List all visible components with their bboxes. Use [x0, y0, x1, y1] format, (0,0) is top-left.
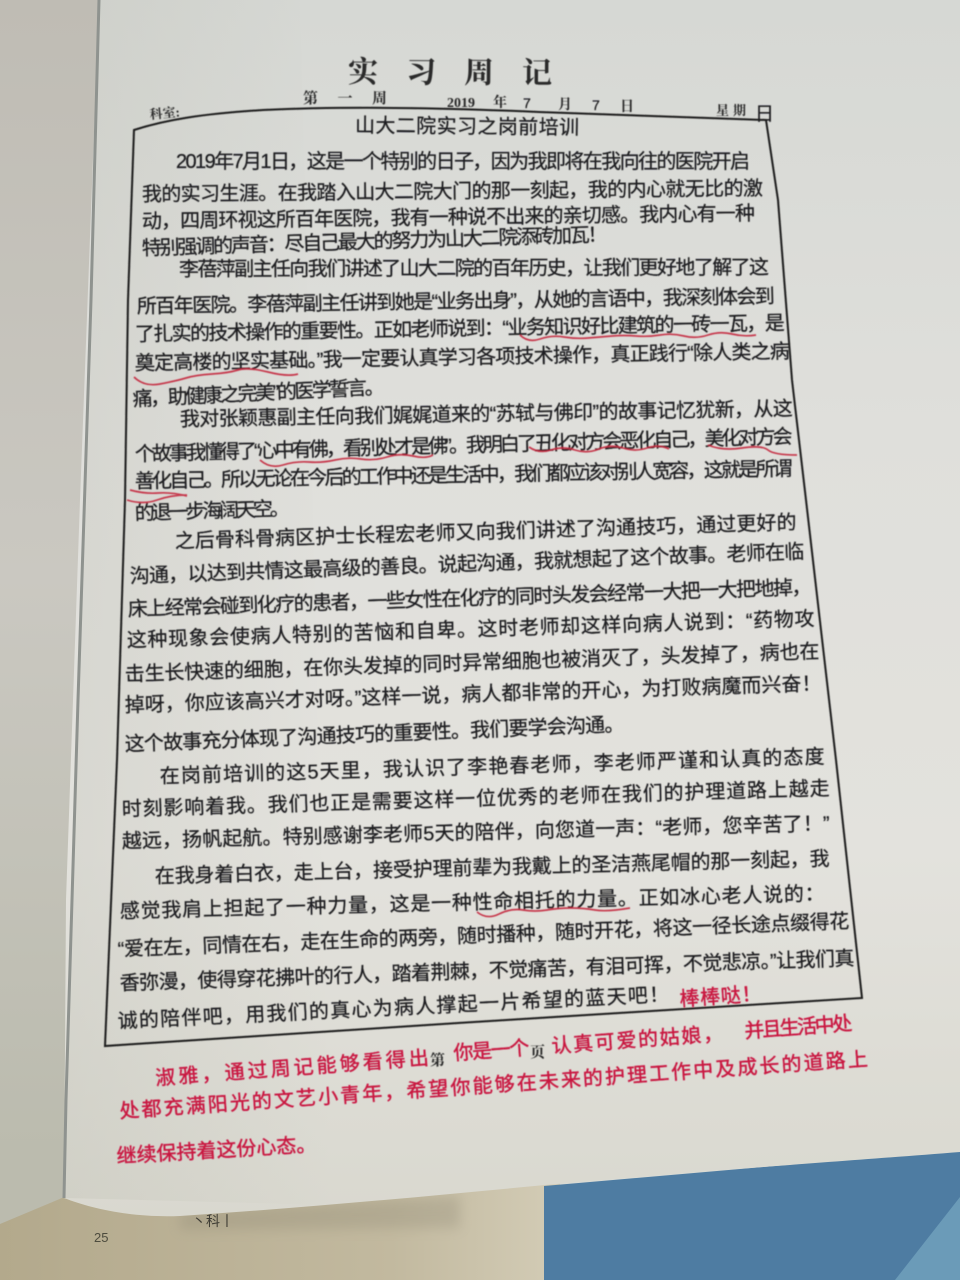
background: light blue cloth corner: [895, 1197, 960, 1280]
date label: 7: [592, 97, 600, 113]
page number: 25: [94, 1230, 108, 1245]
paragraph 4: 沟通，以达到共情这最高级的善良。说起沟通，我就想起了这个故事。老师在临: [129, 540, 805, 588]
paragraph 4: 这种现象会使病人特别的苦恼和自卑。这时老师却这样向病人说到：“药物攻: [126, 607, 815, 652]
paragraph 5: [121, 745, 830, 853]
date label: 7: [523, 95, 531, 111]
paragraph 2: 奠定高楼的坚实基础。”我一定要认真学习各项技术操作，真正践行“除人类之病: [135, 340, 790, 375]
paragraph 4: 这个故事充分体现了沟通技巧的重要性。我们要学会沟通。: [124, 713, 625, 756]
paragraph 3: 我对张颖惠副主任向我们娓娓道来的“苏轼与佛印”的故事记忆犹新，从这: [180, 397, 793, 431]
date label: 2019: [447, 96, 475, 111]
page header: [149, 56, 774, 125]
weekday label: 星期: [716, 103, 746, 118]
teacher red comment: 继续保持着这份心态。: [116, 1133, 317, 1168]
paragraph 1: 我的实习生涯。在我踏入山大二院大门的那一刻起，我的内心就无比的激: [142, 177, 763, 206]
background: table surface: [0, 1170, 560, 1280]
department label: 科室:: [149, 104, 180, 122]
paragraph 2: 李蓓萍副主任向我们讲述了山大二院的百年历史，让我们更好地了解了这: [179, 256, 769, 281]
teacher red comment: 处都充满阳光的文艺小青年，希望你能够在未来的护理工作中及成长的道路上: [119, 1048, 869, 1123]
teacher red comment: 认真可爱的姑娘，: [551, 1022, 724, 1058]
paragraph 4: 床上经常会碰到化疗的患者，一些女性在化疗的同时头发会经常一大把一大把地掉，: [127, 576, 812, 621]
background: facing page: [0, 0, 110, 1280]
paragraph 5: 时刻影响着我。我们也正是需要这样一位优秀的老师在我们的护理道路上越走: [121, 777, 830, 821]
paragraph 3: 的退一步海阔天空。: [134, 497, 290, 525]
show-through marks below page: 丶科丨: [192, 1213, 234, 1229]
red wavy underlines: [127, 333, 797, 917]
paragraph 5: 在岗前培训的这5天里，我认识了李艳春老师，李老师严谨和认真的态度: [159, 745, 825, 788]
paragraph 1: 2019年7月1日，这是一个特别的日子，因为我即将在我向往的医院开启: [176, 150, 750, 173]
paragraph 4: 掉呀，你应该高兴才对呀。”这样一说，病人都非常的开心，为打败病魔而兴奋！: [124, 672, 822, 717]
page gutter shadow: [64, 0, 330, 1205]
paragraph 1: 特别强调的声音：尽自己最大的努力为山大二院添砖加瓦！: [141, 223, 608, 260]
paragraph 3: 善化自己。所以无论在今后的工作中还是生活中，我们都应该对别人宽容，这就是所谓: [135, 457, 793, 493]
teacher red comment: [116, 1012, 869, 1168]
paragraph 2: 了扎实的技术操作的重要性。正如老师说到：“业务知识好比建筑的一砖一瓦，是: [135, 312, 785, 346]
background: blue cloth: [544, 1150, 960, 1280]
paragraph 6: “爱在左，同情在右，走在生命的两旁，随时播种，随时开花，将这一径长途点缀得花: [117, 910, 850, 961]
week label: 第一周: [303, 90, 387, 107]
weekday value: 日: [755, 104, 774, 125]
date label: 月: [558, 97, 572, 113]
essay heading: 山大二院实习之岗前培训: [355, 114, 579, 139]
paragraph 4: 击生长快速的细胞，在你头发掉的同时异常细胞也被消灭了，头发掉了，病也在: [124, 640, 820, 686]
paragraph 1: 动，四周环视这所百年医院，我有一种说不出来的亲切感。我内心有一种: [142, 202, 755, 233]
paragraph 3: [134, 397, 793, 525]
title: 实习周记: [348, 56, 552, 90]
paragraph 2: [132, 256, 790, 411]
paragraph 3: 个故事我懂得了“心中有佛，看别处才是佛”。我明白了丑化对方会恶化自己，美化对方会: [135, 425, 793, 466]
printed page marker: di: 第: [430, 1052, 445, 1069]
teacher red comment: 你是一个: [453, 1036, 530, 1065]
form border: [105, 108, 862, 1046]
paragraph 2: 痛，助健康之完美”的医学誓言。: [132, 376, 385, 411]
paragraph 1: [141, 150, 763, 260]
paragraph 6: 香弥漫，使得穿花拂叶的行人，踏着荆棘，不觉痛苦，有泪可挥，不觉悲凉。”让我们真: [119, 947, 855, 995]
date label: 日: [620, 99, 634, 115]
page edge line: [64, 0, 99, 1198]
paragraph 6: [117, 847, 855, 1033]
date label: 年: [493, 94, 507, 111]
paragraph 2: 所百年医院。李蓓萍副主任讲到她是“业务出身”，从她的言语中，我深刻体会到: [137, 285, 775, 318]
paragraph 6: 感觉我肩上担起了一种力量，这是一种性命相托的力量。正如冰心老人说的：: [120, 882, 825, 923]
paragraph 4: 之后骨科骨病区护士长程宏老师又向我们讲述了沟通技巧，通过更好的: [174, 511, 797, 553]
teacher red comment: 并且生活中处: [744, 1012, 853, 1043]
paragraph 6: 诚的陪伴吧，用我们的真心为病人撑起一片希望的蓝天吧！: [117, 983, 670, 1033]
paragraph 4: [124, 511, 822, 756]
red comment: praise: 棒棒哒！: [679, 982, 762, 1011]
paragraph 5: 越远，扬帆起航。特别感谢李老师5天的陪伴，向您道一声：“老师，您辛苦了！”: [122, 812, 830, 853]
printed page marker: ye: 页: [530, 1043, 545, 1061]
teacher red comment: 淑雅，通过周记能够看得出: [155, 1047, 430, 1090]
shadow under page: [180, 1196, 460, 1230]
date label: [447, 94, 634, 115]
paragraph 6: 在我身着白衣，走上台，接受护理前辈为我戴上的圣洁燕尾帽的那一刻起，我: [155, 847, 830, 888]
